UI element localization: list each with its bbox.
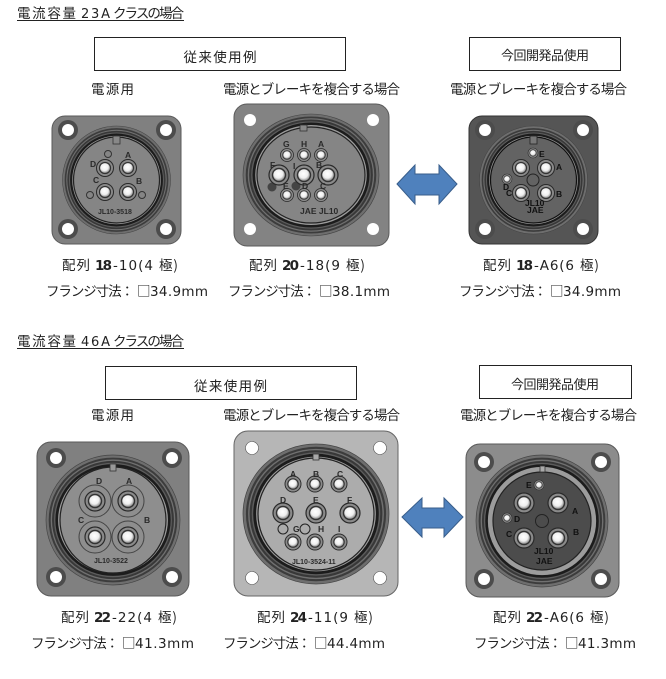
connector 22-A6: E (526, 480, 532, 490)
flange size 41.3: 41.3mm (135, 636, 194, 652)
connector 24-11: E (313, 495, 319, 505)
connector 24-11: JL10-3524-11 (292, 559, 336, 566)
flange size 41.3 new: フランジ寸法： (474, 632, 562, 652)
connector 20-18: A (318, 139, 324, 149)
connector 24-11: A (290, 469, 296, 479)
connector 18-A6: JAE (527, 205, 544, 215)
caption: 22-A6: 配列 (493, 606, 521, 626)
connector 22-22: D (96, 476, 102, 486)
connector 24-11: D (280, 495, 286, 505)
caption: 22-22: 22 (94, 610, 111, 626)
connector 22-22: JL10-3522 (94, 558, 128, 565)
section 1 heading: 電流容量 (17, 2, 76, 22)
connector 24-11: B (313, 469, 319, 479)
flange size 34.9 new: 34.9mm (563, 284, 621, 300)
connector 24-11: H (318, 524, 324, 534)
connector 22-A6 (466, 444, 619, 597)
flange size 34.9: フランジ寸法： (46, 280, 134, 300)
section 2 heading: 電流容量 (17, 330, 76, 350)
connector 20-18: E (283, 181, 289, 191)
connector 22-A6: A (572, 506, 578, 516)
caption: 22-22: -22(4 (112, 610, 152, 626)
connector 20-18: F (270, 160, 275, 170)
flange size 34.9 new: □ (550, 280, 564, 300)
section 2 heading: クラスの場合 (113, 330, 184, 350)
label: power and brake new: 電源とブレーキを複合する場合 (450, 78, 628, 98)
connector 18-10 (52, 116, 181, 244)
caption: 24-11: 配列 (257, 606, 285, 626)
connector 18-A6: JL10 (525, 198, 545, 208)
connector 22-22: A (126, 476, 132, 486)
box: new product 2 (480, 366, 632, 398)
caption: 18-A6: -A6(6 (534, 258, 574, 274)
flange size 41.3: フランジ寸法： (31, 632, 119, 652)
section 2 heading: 46A (81, 335, 110, 350)
connector 18-A6: D (503, 182, 509, 192)
connector 18-A6: E (539, 149, 545, 159)
connector 24-11: G (293, 524, 300, 534)
box: conventional example: 従来使用例 (184, 46, 256, 66)
box: new product: 今回開発品使用 (501, 45, 589, 64)
connector 22-A6: C (506, 529, 512, 539)
flange size 34.9: 34.9mm (150, 284, 208, 300)
caption: 24-11: 24 (290, 610, 307, 626)
caption: 24-11: 極) (354, 606, 373, 626)
caption: 20-18: 配列 (249, 254, 277, 274)
label: power: 電源用 (91, 78, 134, 98)
label: power and brake 2: 電源とブレーキを複合する場合 (223, 404, 400, 424)
connector 20-18: H (301, 139, 307, 149)
connector 20-18: JAE JL10 (300, 206, 339, 216)
caption: 18-A6: 極) (580, 254, 599, 274)
connector 20-18: D (302, 181, 308, 191)
connector 24-11: F (347, 495, 352, 505)
caption: 18-A6: 18 (516, 258, 533, 274)
section 2 heading (17, 330, 184, 350)
label: power 2: 電源用 (91, 404, 134, 424)
connector 20-18: C (320, 181, 326, 191)
connector 24-11 (234, 431, 398, 596)
connector 22-A6: JL10 (534, 546, 554, 556)
caption: 18-10: 18 (95, 258, 112, 274)
connector 20-18: G (283, 139, 290, 149)
connector 18-A6: C (506, 188, 512, 198)
flange size 44.4: □ (314, 632, 328, 652)
caption: 18-10: 極) (159, 254, 178, 274)
connector 18-10: B (136, 176, 142, 186)
box: conventional example (94, 38, 346, 70)
caption: 20-18: 20 (282, 258, 299, 274)
connector 18-A6 (469, 116, 598, 244)
connector 22-A6: B (573, 527, 579, 537)
flange size 38.1: □ (319, 280, 332, 300)
connector 22-22: B (144, 515, 150, 525)
connector 22-22: C (78, 515, 84, 525)
arrow: bottom comparison (402, 498, 463, 537)
caption: 22-A6: 22 (526, 610, 543, 626)
connector 24-11: C (337, 469, 343, 479)
box: conventional example 2 (106, 366, 356, 400)
connector 20-18: B (316, 160, 322, 170)
caption: 18-10: 配列 (62, 254, 90, 274)
caption: 22-A6: 極) (590, 606, 609, 626)
flange size 41.3 new: □ (565, 632, 578, 652)
box: conventional example 2: 従来使用例 (194, 375, 267, 395)
flange size 41.3: □ (122, 632, 136, 652)
connector 20-18: I (293, 161, 295, 171)
flange size 41.3 new: 41.3mm (578, 636, 636, 652)
section 1 heading (17, 2, 184, 22)
connector 24-11: I (338, 524, 340, 534)
caption: 24-11: -11(9 (308, 610, 348, 626)
caption: 20-18: 極) (346, 254, 365, 274)
box: new product 2: 今回開発品使用 (511, 374, 599, 393)
connector 18-10: C (93, 175, 99, 185)
caption: 18-10: -10(4 (113, 258, 153, 274)
flange size 44.4: フランジ寸法： (223, 632, 311, 652)
caption: 22-22: 極) (158, 606, 177, 626)
arrow: top comparison (397, 165, 457, 204)
connector 18-A6: A (556, 162, 562, 172)
connector 20-18 (234, 104, 389, 246)
connector 18-10: A (125, 150, 131, 160)
connector 22-A6: JAE (536, 556, 553, 566)
caption: 22-A6: -A6(6 (544, 610, 584, 626)
caption: 22-22: 配列 (61, 606, 89, 626)
flange size 34.9: □ (137, 280, 150, 300)
label: power and brake: 電源とブレーキを複合する場合 (223, 78, 400, 98)
flange size 38.1: 38.1mm (332, 284, 390, 300)
flange size 38.1: フランジ寸法： (228, 280, 316, 300)
flange size 44.4: 44.4mm (327, 636, 385, 652)
connector 18-10: JL10-3518 (98, 209, 132, 216)
connector 22-A6: D (514, 514, 520, 524)
section 1 heading: クラスの場合 (113, 2, 184, 22)
box: new product (470, 38, 620, 70)
connector 18-10: D (90, 159, 96, 169)
connector 18-A6: B (556, 189, 562, 199)
label: power and brake new 2: 電源とブレーキを複合する場合 (460, 404, 638, 424)
caption: 20-18: -18(9 (300, 258, 340, 274)
connector 22-22 (37, 442, 189, 596)
flange size 34.9 new: フランジ寸法： (459, 280, 547, 300)
caption: 18-A6: 配列 (483, 254, 511, 274)
section 1 heading: 23A (81, 7, 110, 22)
